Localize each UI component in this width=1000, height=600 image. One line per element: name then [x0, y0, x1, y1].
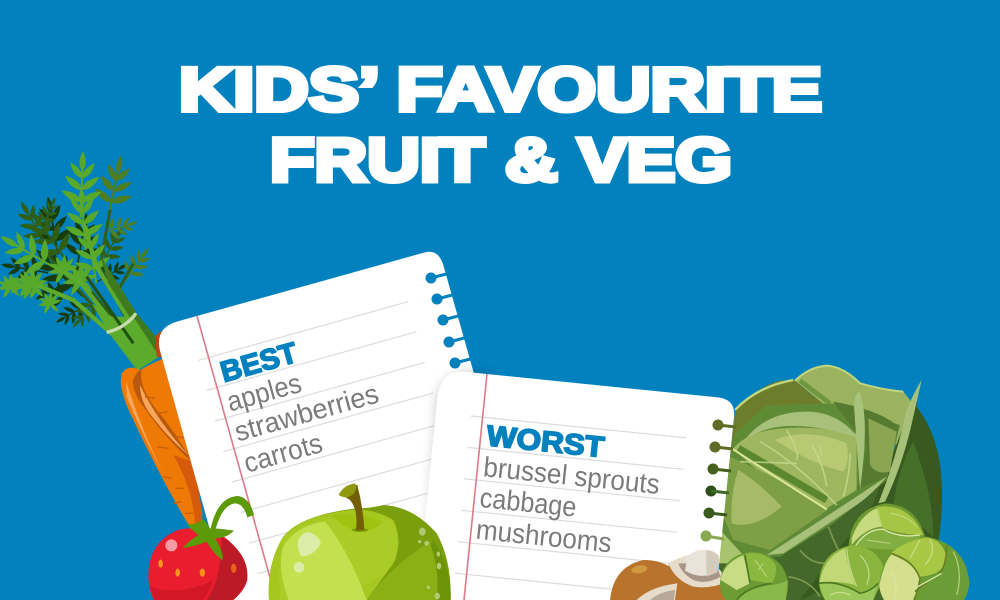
- list: worst items: [475, 451, 661, 563]
- note: best list: [159, 252, 538, 600]
- sprout: lower right: [879, 537, 969, 600]
- heading: best: BEST: [217, 337, 301, 389]
- list: best items: apples: [223, 367, 305, 417]
- title: [179, 56, 822, 195]
- sprouts: right cluster: [819, 503, 969, 600]
- sprout: far left: [720, 552, 788, 600]
- illustration: carrot with leafy top: [0, 151, 202, 530]
- list: best items: carrots: [240, 427, 326, 479]
- illustration: cabbage: [718, 366, 942, 600]
- note: worst list: [417, 372, 736, 600]
- illustration: green apple: [269, 483, 451, 600]
- list: worst items: cabbage: [478, 482, 578, 523]
- note shadow: [425, 372, 490, 590]
- list: best items: strawberries: [231, 378, 382, 447]
- sprout: top: [848, 503, 925, 578]
- heading: worst: WORST: [485, 420, 606, 464]
- title: FRUIT & VEG: [270, 126, 732, 195]
- notepaper: [417, 372, 734, 600]
- ring holes: [426, 273, 474, 368]
- list: best items: [223, 348, 391, 479]
- ring holes: [700, 420, 736, 542]
- illustration: brussels sprouts: [720, 503, 969, 600]
- sprout: lower left: [819, 545, 885, 600]
- carrot foliage: [0, 151, 159, 340]
- list: worst items: brussel sprouts: [482, 451, 661, 500]
- illustration: mushrooms: [610, 550, 729, 600]
- title: KIDS’ FAVOURITE: [179, 56, 822, 124]
- carrot stalks: [37, 223, 159, 371]
- illustration: strawberry: [148, 496, 254, 600]
- notepaper: [159, 252, 538, 600]
- list: worst items: mushrooms: [475, 514, 613, 558]
- carrot root: [121, 329, 202, 530]
